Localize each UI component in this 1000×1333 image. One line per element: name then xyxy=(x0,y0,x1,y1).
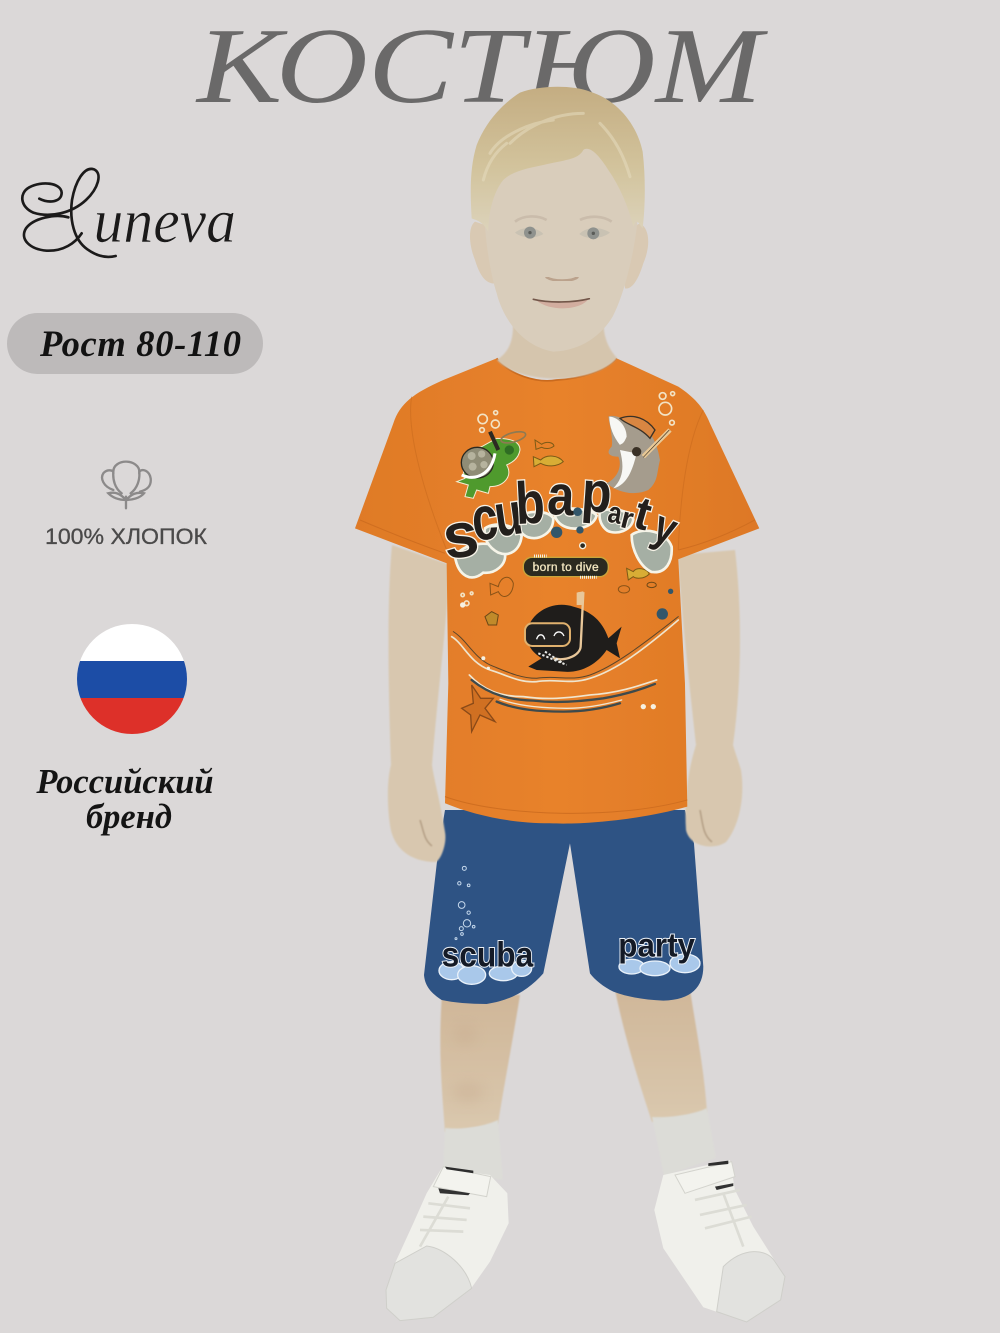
dots over lettering xyxy=(551,507,673,620)
scuba party reflection xyxy=(455,509,672,577)
left leg print: scuba xyxy=(439,866,534,984)
icon: russian flag xyxy=(77,624,187,734)
left shoe xyxy=(386,1167,509,1321)
scuba party letters: a xyxy=(546,463,577,528)
legs xyxy=(440,985,707,1132)
right shoe xyxy=(654,1160,785,1322)
turtle xyxy=(457,430,527,498)
boy figure xyxy=(355,87,785,1322)
brand origin text xyxy=(35,763,214,836)
mouth xyxy=(533,299,589,308)
shark xyxy=(607,416,670,493)
hair strands xyxy=(483,113,630,180)
small fish xyxy=(485,440,656,625)
small white dots xyxy=(460,602,656,709)
title: КОСТЮМ xyxy=(195,7,768,126)
head xyxy=(470,87,648,352)
height badge: Рост 80-110 xyxy=(39,323,241,364)
bubbles xyxy=(461,392,675,606)
scuba party letters: a xyxy=(606,495,626,531)
left leg print: scuba: scuba xyxy=(442,936,534,975)
brand origin text: Российский xyxy=(35,763,214,801)
scuba party letters: t xyxy=(629,486,657,541)
logo: Luneva xyxy=(22,169,236,257)
scuba party letters xyxy=(438,460,685,573)
scuba party letters: u xyxy=(490,480,526,550)
neck xyxy=(497,310,617,379)
scuba party letters: c xyxy=(468,483,501,554)
cotton label: 100% ХЛОПОК xyxy=(45,524,207,549)
scuba party letters: p xyxy=(580,460,614,526)
waves xyxy=(452,617,678,712)
starfish xyxy=(462,685,495,732)
nose xyxy=(547,277,577,281)
scuba party letters: y xyxy=(646,499,685,555)
socks xyxy=(443,1108,716,1180)
hair xyxy=(471,87,645,232)
height badge xyxy=(7,313,263,374)
brand origin text: бренд xyxy=(86,798,172,836)
born to dive badge: born to dive xyxy=(533,560,599,574)
right leg print: party: party xyxy=(618,928,695,965)
whale xyxy=(525,591,622,672)
bubbles xyxy=(455,866,475,940)
scuba party letters: s xyxy=(438,499,483,573)
shorts xyxy=(424,810,703,1004)
born to dive badge xyxy=(523,556,608,577)
scuba party letters: r xyxy=(618,501,637,536)
ears xyxy=(470,222,648,288)
icon: cotton xyxy=(102,462,151,508)
shirt xyxy=(355,358,759,824)
knee shading xyxy=(452,1025,484,1102)
scuba party letters: b xyxy=(514,470,546,537)
face xyxy=(484,143,638,352)
eyes xyxy=(515,216,612,239)
arms and hands xyxy=(388,545,742,862)
